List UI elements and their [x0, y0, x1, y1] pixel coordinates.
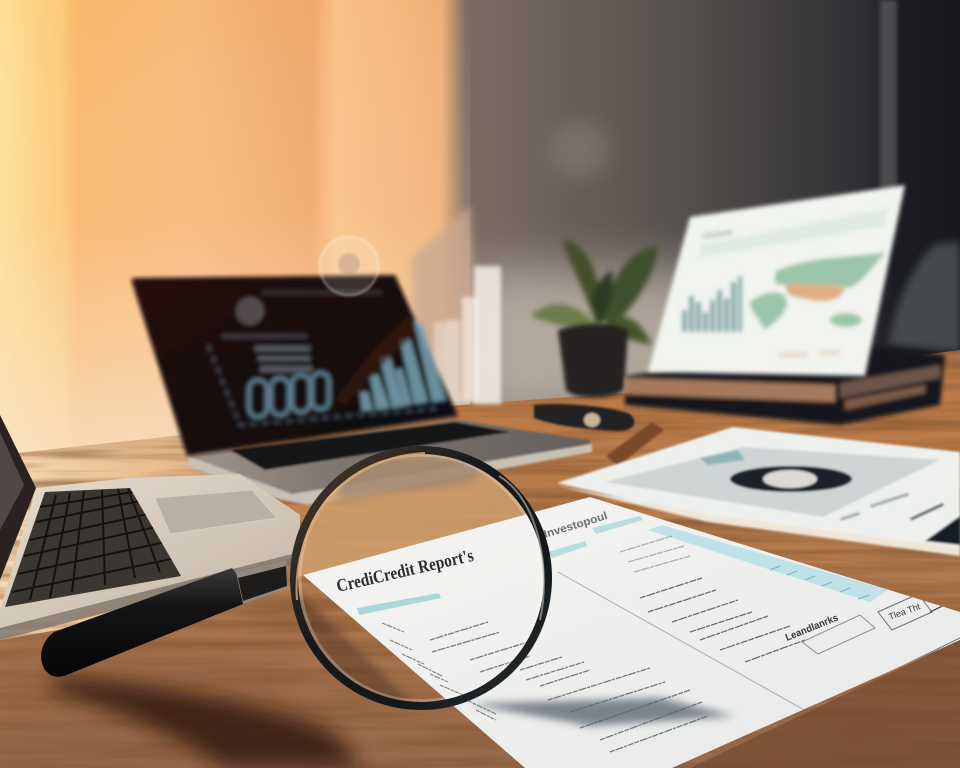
brochure corner — [925, 516, 960, 545]
header bands — [698, 208, 888, 258]
screen avatar — [236, 297, 264, 325]
laptop screen — [131, 275, 458, 456]
stack of books — [625, 345, 945, 425]
report title: CrediCredit Report's — [334, 545, 475, 596]
mouse and pen — [534, 404, 664, 466]
report inner rules — [558, 572, 960, 712]
world map — [750, 252, 886, 330]
cast shadow on report — [470, 698, 735, 726]
screen bar chart — [360, 322, 446, 411]
left laptop — [0, 415, 302, 640]
credit report document — [303, 497, 960, 768]
brochure dark badge — [730, 466, 852, 492]
screen digits — [249, 373, 329, 417]
side brochure — [557, 427, 960, 556]
background wall — [0, 0, 960, 470]
left column labels — [382, 623, 496, 720]
wooden desk — [0, 340, 960, 768]
footer chips — [778, 350, 840, 358]
signature block: Leandlanrks — [784, 612, 840, 644]
plant pot — [558, 324, 628, 398]
chair — [888, 242, 960, 352]
standing dashboard report — [648, 185, 905, 376]
lens ring — [294, 450, 548, 706]
brochure grey panel — [605, 447, 940, 517]
left laptop body — [0, 474, 300, 628]
signature block — [785, 596, 942, 654]
bar chart — [682, 276, 742, 332]
shadow of magnifier on desk — [52, 676, 360, 768]
handle — [41, 560, 288, 677]
trackpad — [155, 490, 277, 534]
right column text lines — [620, 536, 805, 662]
plant leaves — [530, 240, 658, 345]
laptop base — [187, 420, 592, 505]
teal table strip — [648, 525, 888, 602]
white bar sculpture behind laptop — [434, 266, 501, 404]
brochure captions — [840, 493, 944, 521]
screen axis — [208, 345, 440, 425]
signature block: Tlea Tht — [887, 601, 922, 622]
lens — [298, 454, 526, 702]
handle collar — [236, 560, 288, 604]
screen text rows — [222, 290, 382, 372]
teal highlight chips — [357, 516, 643, 615]
keyboard — [5, 488, 181, 607]
ring highlight — [297, 453, 425, 600]
left laptop screen — [0, 415, 36, 580]
centre laptop — [131, 275, 592, 505]
middle text lines — [430, 622, 708, 752]
screen trend shadow — [335, 315, 415, 405]
floating translucent coin icon — [318, 235, 380, 297]
magnifying glass — [41, 450, 590, 720]
potted plant — [530, 240, 658, 398]
brochure teal chip — [700, 450, 745, 465]
report subtitle: Investopoul — [542, 510, 609, 541]
